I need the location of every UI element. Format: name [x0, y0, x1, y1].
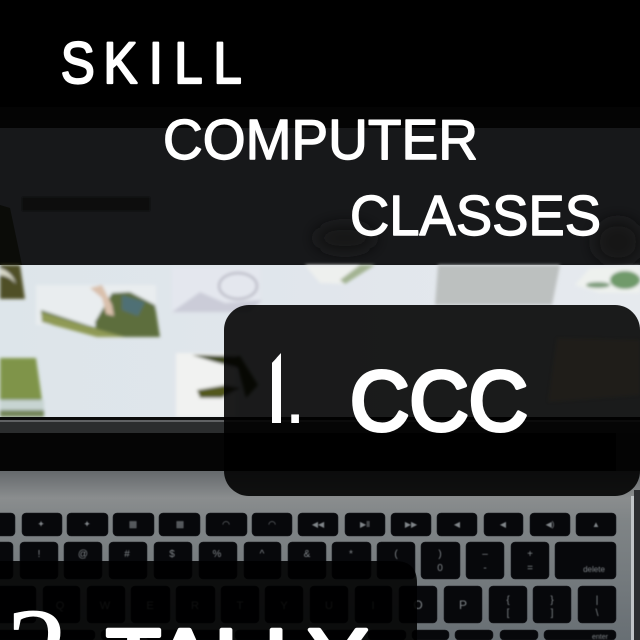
- item number 1: .: [284, 351, 306, 440]
- key legends: [: [507, 608, 510, 619]
- key legends: P: [459, 598, 467, 612]
- keyboard keys: [0, 513, 616, 640]
- item name CCC: CCC: [350, 354, 528, 448]
- key legends: ): [438, 549, 442, 560]
- key legends: [37, 519, 609, 640]
- title: Skill Computer Classes: [61, 31, 601, 248]
- key legends: ]: [551, 608, 554, 619]
- key legends: ▦: [176, 519, 184, 529]
- panel: item 2 Tally: [0, 561, 417, 640]
- key legends: ▶Ⅱ: [360, 520, 370, 529]
- keyboard deck: [0, 471, 640, 640]
- key legends: U: [325, 600, 333, 612]
- laptop bezel: [0, 417, 640, 420]
- key legends: $: [169, 549, 175, 560]
- key legends: (: [394, 549, 398, 560]
- key legends: ▶▶: [405, 520, 418, 529]
- key legends: |: [596, 595, 598, 606]
- key legends: !: [38, 549, 40, 560]
- key legends: ◠: [268, 519, 276, 529]
- key legends: –: [482, 549, 488, 560]
- key legends: {: [506, 595, 510, 606]
- key legends: ◀◀: [312, 520, 325, 529]
- key legends: ✦: [37, 519, 45, 529]
- key legends: ▦: [129, 519, 137, 529]
- item number 1: [272, 353, 299, 423]
- key legends: ◀: [500, 520, 507, 529]
- key legends: ^: [260, 549, 265, 560]
- key legends: W: [100, 600, 111, 612]
- key legends: ✦: [83, 519, 91, 529]
- title line CLASSES: CLASSES: [350, 184, 601, 248]
- item number 1: 1: [245, 331, 302, 445]
- key legends: ◀): [546, 520, 555, 529]
- key legends: \: [596, 608, 599, 619]
- key legends: #: [124, 549, 130, 560]
- key legends: &: [304, 549, 311, 560]
- key legends: -: [483, 563, 487, 574]
- key legends: *: [349, 549, 353, 560]
- key legends: ◠: [222, 519, 230, 529]
- key legends: R: [191, 600, 199, 612]
- key legends: O: [413, 598, 423, 612]
- key legends: I: [371, 600, 375, 612]
- key legends: ▲: [592, 520, 600, 529]
- key legends: 0: [437, 563, 443, 574]
- key legends: T: [237, 600, 244, 612]
- key legends: delete: [583, 565, 605, 574]
- key legends: Y: [280, 600, 288, 612]
- panel: item 1 CCC: [224, 305, 640, 496]
- laptop screen: [0, 265, 640, 418]
- key legends: @: [78, 549, 88, 560]
- key legends: Q: [56, 600, 65, 612]
- title line COMPUTER: COMPUTER: [163, 108, 478, 172]
- title line SKILL: SKILL: [61, 31, 242, 96]
- key legends: E: [146, 600, 154, 612]
- key legends: %: [213, 549, 222, 560]
- key legends: =: [527, 563, 533, 574]
- key legends: }: [550, 595, 554, 606]
- laptop lid dark area: [0, 128, 640, 265]
- key legends: ◀: [454, 520, 461, 529]
- key legends: +: [527, 549, 533, 560]
